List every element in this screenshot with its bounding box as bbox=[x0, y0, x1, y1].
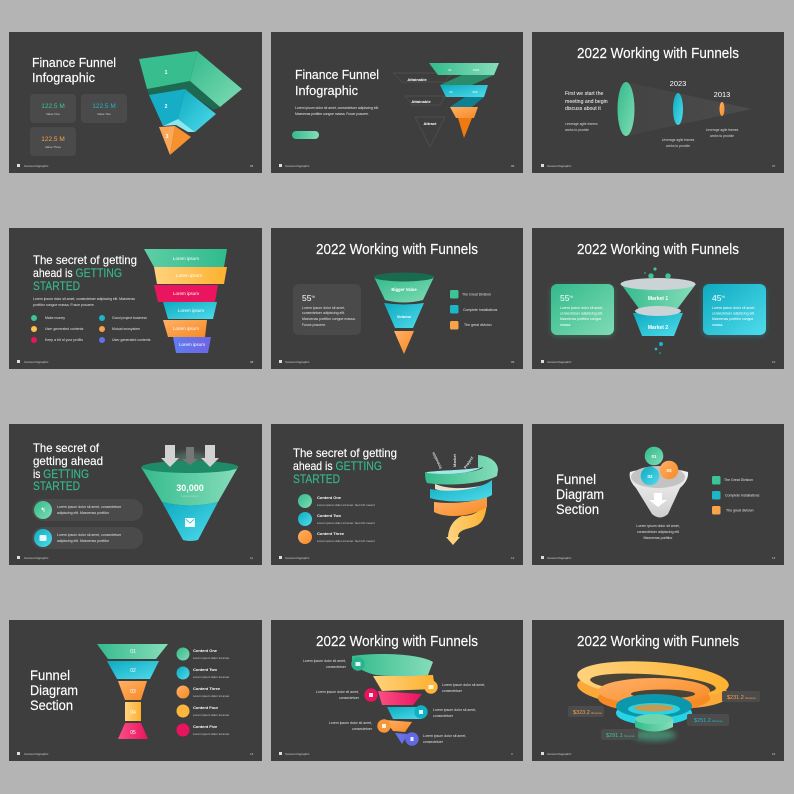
stat card: Maecenas porttitor congue massa. bbox=[302, 317, 356, 321]
title: Finance Funnel bbox=[32, 55, 116, 70]
footer: Canva Infographic bbox=[24, 164, 49, 168]
title: Funnel bbox=[556, 472, 596, 487]
title: Infographic bbox=[32, 70, 95, 85]
ghost labels bbox=[407, 77, 437, 126]
title: STARTED bbox=[293, 472, 340, 486]
footer bbox=[279, 360, 515, 364]
body text: Maecenas porttitor congue massa. Fusce posuere. bbox=[295, 112, 369, 116]
value label: orange left: $323.2 Revenue bbox=[573, 710, 602, 716]
captions: Lorem ipsum dolor sit amet, bbox=[442, 683, 485, 687]
title bbox=[33, 253, 137, 293]
numbered balls: 02 bbox=[647, 474, 653, 479]
legend bbox=[450, 290, 498, 330]
funnel: Lorem ipsum bbox=[178, 308, 204, 313]
green card: massa. bbox=[560, 323, 571, 327]
title: The secret of getting bbox=[293, 446, 397, 460]
funnel: Bigger Value bbox=[391, 287, 417, 292]
captions: works to provide bbox=[666, 144, 690, 148]
content list: Content One bbox=[193, 648, 218, 653]
captions: Lorem ipsum dolor sit amet, bbox=[303, 659, 346, 663]
content list: Content Four bbox=[193, 705, 219, 710]
title: Diagram bbox=[30, 683, 78, 698]
green card: 55 bbox=[560, 293, 569, 303]
content list: Content One bbox=[317, 495, 342, 500]
title bbox=[33, 441, 103, 493]
footer: 13 bbox=[772, 556, 776, 560]
stat cards: Value One bbox=[46, 112, 60, 116]
pill one: Lorem ipsum dolor sit amet, consectetuer bbox=[57, 505, 122, 509]
pill one: ↰ bbox=[40, 507, 46, 514]
legend: The great division bbox=[464, 323, 492, 327]
captions: works to provide bbox=[710, 134, 734, 138]
caption: Maecenas porttitor bbox=[644, 536, 673, 540]
legend: The Great Division bbox=[462, 292, 491, 296]
panel: stacked tilted funnel bbox=[271, 620, 523, 761]
content list: Lorem ipsum dolor sit amet. Get rich meant bbox=[317, 539, 375, 543]
footer: Canva Infographic bbox=[547, 752, 572, 756]
content list: Lorem ipsum dolor sit amet. Get rich meant bbox=[317, 503, 375, 507]
ghost labels: Attainable bbox=[407, 77, 427, 82]
arrows bbox=[161, 445, 219, 467]
footer: Canva Infographic bbox=[24, 556, 49, 560]
title: Section bbox=[556, 502, 599, 517]
title bbox=[32, 55, 116, 85]
bullet list: User generated contents bbox=[45, 327, 84, 331]
funnel: Lorem ipsum bbox=[173, 256, 199, 261]
pill two: adipiscing elit. Maecenas porttitor bbox=[57, 539, 110, 543]
legend: The great division bbox=[726, 508, 754, 512]
panel: six-step funnel bbox=[9, 228, 262, 369]
green card: % bbox=[569, 294, 573, 299]
stat card: consectetuer adipiscing elit. bbox=[302, 311, 345, 315]
funnel: 30,000 bbox=[176, 483, 204, 493]
title: Funnel bbox=[30, 668, 70, 683]
stat cards: Value Three bbox=[45, 145, 61, 149]
panel: ring funnel bbox=[532, 620, 784, 761]
title: The secret of getting bbox=[33, 253, 137, 267]
captions: consectetuer bbox=[442, 689, 463, 693]
funnel bbox=[144, 249, 227, 353]
footer: 3 bbox=[511, 752, 513, 756]
funnel: 04 bbox=[130, 710, 136, 716]
content list: Lorem ipsum dolor sit amet bbox=[193, 675, 229, 679]
footer: 16 bbox=[772, 752, 776, 756]
3D funnel bbox=[139, 51, 242, 155]
title: Finance Funnel bbox=[295, 67, 379, 82]
footer: 12 bbox=[511, 556, 515, 560]
stat card: Fusce posuere. bbox=[302, 323, 326, 327]
heading: 2022 Working with Funnels bbox=[577, 242, 739, 258]
heading: 2022 Working with Funnels bbox=[316, 242, 478, 258]
ghost labels: Attract bbox=[424, 121, 437, 126]
legend: Complete Installations bbox=[725, 494, 760, 498]
title bbox=[293, 446, 397, 486]
green card: Lorem ipsum dolor sit amet, bbox=[560, 306, 603, 310]
pill one: adipiscing elit. Maecenas porttitor bbox=[57, 511, 110, 515]
body text bbox=[295, 106, 379, 116]
captions: consectetuer bbox=[423, 740, 444, 744]
title bbox=[295, 67, 379, 98]
captions: Leverage agile frames bbox=[662, 138, 695, 142]
legend bbox=[712, 476, 760, 514]
value label: orange right: $231.2 Revenue bbox=[727, 695, 756, 701]
title bbox=[556, 472, 604, 517]
footer: Canva Infographic bbox=[285, 164, 310, 168]
bullet list: Keep a bit of your profits bbox=[45, 338, 83, 342]
ellipses bbox=[618, 82, 724, 136]
funnel: Lorem ipsum bbox=[179, 342, 205, 347]
content list: Content Two bbox=[317, 513, 341, 518]
blue card: 45 bbox=[712, 293, 721, 303]
numbered balls: 01 bbox=[651, 454, 657, 459]
stat cards: 122.5 M bbox=[92, 103, 116, 110]
lead text: First we start the bbox=[565, 91, 603, 97]
caption: consectetuer adipiscing elit bbox=[637, 530, 679, 534]
panel: three-tier funnel bbox=[271, 228, 523, 369]
title: STARTED bbox=[33, 479, 80, 493]
pill two bbox=[32, 527, 143, 549]
title: Section bbox=[30, 698, 73, 713]
icon: mail bbox=[185, 518, 195, 527]
value label: orange left bbox=[568, 706, 604, 717]
footer: 05 bbox=[250, 164, 254, 168]
footer bbox=[541, 752, 776, 756]
bullet list: Good project business bbox=[112, 316, 147, 320]
value label: orange right bbox=[722, 691, 760, 702]
footer: 08 bbox=[250, 360, 254, 364]
funnel: 02 bbox=[130, 668, 136, 674]
bullet list: User-generated contents bbox=[112, 338, 151, 342]
funnel: Lorem ipsum bbox=[176, 273, 202, 278]
ribbon funnel bbox=[429, 63, 499, 138]
funnel bbox=[374, 272, 434, 354]
bullet list bbox=[31, 315, 151, 343]
funnel bbox=[620, 278, 696, 336]
numbered balls bbox=[641, 447, 678, 485]
lead text: discuss about it bbox=[565, 106, 601, 112]
funnel: Market 2 bbox=[648, 325, 668, 331]
funnel: Lorem ipsum bbox=[181, 494, 199, 498]
green card bbox=[551, 284, 614, 336]
blue card: Lorem ipsum dolor sit amet, bbox=[712, 306, 755, 310]
footer bbox=[541, 164, 776, 168]
years bbox=[670, 79, 730, 99]
content list: Content Three bbox=[193, 686, 221, 691]
footer bbox=[17, 164, 254, 168]
spiral ribbon bbox=[425, 455, 498, 545]
panel: working with funnels cone bbox=[532, 32, 784, 173]
content list: Lorem ipsum dolor sit amet bbox=[193, 656, 229, 660]
content list: Lorem ipsum dolor sit amet bbox=[193, 694, 229, 698]
icon circles bbox=[351, 657, 438, 746]
panel: spiral funnel bbox=[271, 424, 523, 565]
footer: Canva Infographic bbox=[547, 556, 572, 560]
years: 2013 bbox=[714, 90, 730, 99]
ribbon labels: Market bbox=[452, 453, 457, 467]
funnel: Volume bbox=[397, 314, 412, 319]
title: The secret of bbox=[33, 441, 100, 455]
value label: cyan: $251.2 Revenue bbox=[694, 718, 723, 724]
legend: The Great Division bbox=[724, 478, 753, 482]
footer: Canva Infographic bbox=[547, 164, 572, 168]
title: Infographic bbox=[295, 83, 358, 98]
captions bbox=[565, 122, 739, 148]
panel: finance funnel ribbon bbox=[271, 32, 523, 173]
heading: 2022 Working with Funnels bbox=[577, 634, 739, 650]
content list: Content Three bbox=[317, 531, 345, 536]
ghost labels: Attainable bbox=[411, 99, 431, 104]
caption: Lorem ipsum dolor sit amet, bbox=[636, 524, 680, 528]
captions: Lorem ipsum dolor sit amet, bbox=[423, 734, 466, 738]
stat cards: 122.5 M bbox=[41, 136, 65, 143]
footer bbox=[17, 752, 254, 756]
content list bbox=[298, 494, 375, 544]
pill two: Lorem ipsum dolor sit amet, consectetuer bbox=[57, 533, 122, 537]
captions: Leverage agile frames bbox=[706, 128, 739, 132]
ribbon funnel: 01 bbox=[448, 68, 452, 72]
captions: works to provide bbox=[565, 128, 589, 132]
blue card: % bbox=[721, 294, 725, 299]
stat card: 55 bbox=[302, 293, 311, 303]
title: ahead is GETTING bbox=[33, 266, 122, 280]
ribbon funnel: 500 bbox=[472, 90, 478, 94]
cone bbox=[626, 82, 752, 136]
footer: Canva Infographic bbox=[24, 360, 49, 364]
blue card: consectetuer adipiscing elit. bbox=[712, 312, 755, 316]
footer bbox=[17, 360, 254, 364]
ribbon funnel: 02 bbox=[449, 90, 453, 94]
footer bbox=[279, 752, 513, 756]
footer: Canva Infographic bbox=[285, 752, 310, 756]
ribbon funnel: 1000 bbox=[473, 68, 480, 72]
content list: Content Two bbox=[193, 667, 217, 672]
funnel: 03 bbox=[130, 689, 136, 695]
value label: green bbox=[601, 729, 638, 740]
funnel: 05 bbox=[130, 730, 136, 736]
captions: Lorem ipsum dolor sit amet, bbox=[329, 721, 372, 725]
footer: 14 bbox=[250, 752, 254, 756]
stacked rings bbox=[576, 657, 730, 741]
captions: Lorem ipsum dolor sit amet, bbox=[316, 690, 359, 694]
funnel bbox=[97, 644, 168, 739]
heading: 2022 Working with Funnels bbox=[316, 634, 478, 650]
bullet list: Make money bbox=[45, 316, 65, 320]
panel: hourglass funnel bbox=[9, 620, 262, 761]
ribbon labels: Project bbox=[463, 455, 475, 470]
footer: 06 bbox=[511, 164, 515, 168]
stat card: Lorem ipsum dolor sit amet, bbox=[302, 306, 345, 310]
funnel: 01 bbox=[130, 649, 136, 655]
content list bbox=[176, 648, 229, 736]
3D funnel: 2 bbox=[165, 104, 168, 110]
footer bbox=[541, 556, 776, 560]
body text bbox=[33, 297, 135, 307]
captions: consectetuer bbox=[339, 696, 360, 700]
3D funnel: 1 bbox=[165, 70, 168, 76]
captions: consectetuer bbox=[433, 714, 454, 718]
footer: 11 bbox=[250, 556, 253, 560]
funnel: Market 1 bbox=[648, 296, 668, 302]
content list: Lorem ipsum dolor sit amet bbox=[193, 713, 229, 717]
pill one bbox=[32, 499, 143, 521]
dots bbox=[644, 267, 671, 354]
numbered balls: 03 bbox=[666, 468, 672, 473]
funnel: Lorem ipsum bbox=[173, 326, 199, 331]
lead text: meeting and begin bbox=[565, 99, 608, 105]
content list: Content Five bbox=[193, 724, 218, 729]
funnel layers bbox=[352, 654, 435, 744]
white funnel bbox=[630, 466, 688, 518]
funnel: Lorem ipsum bbox=[173, 291, 199, 296]
footer bbox=[541, 360, 776, 364]
value label: green: $291.1 Revenue bbox=[606, 733, 635, 739]
captions: Lorem ipsum dolor sit amet, bbox=[433, 708, 476, 712]
content list: Lorem ipsum dolor sit amet. Get rich meant bbox=[317, 521, 375, 525]
stat cards: Value Two bbox=[97, 112, 111, 116]
legend: Complete Installations bbox=[463, 308, 498, 312]
funnel bbox=[141, 452, 238, 541]
ghost outline funnel bbox=[393, 73, 452, 147]
blue card bbox=[703, 284, 766, 336]
years: 2023 bbox=[670, 79, 686, 88]
green card: Maecenas porttitor congue bbox=[560, 317, 601, 321]
footer bbox=[279, 556, 515, 560]
stat card: % bbox=[311, 294, 315, 299]
bullet list: Mutual ecosystem bbox=[112, 327, 140, 331]
content list: Lorem ipsum dolor sit amet bbox=[193, 732, 229, 736]
footer bbox=[279, 164, 515, 168]
green card: consectetuer adipiscing elit. bbox=[560, 312, 603, 316]
footer: 07 bbox=[772, 164, 776, 168]
captions: Leverage agile frames bbox=[565, 122, 598, 126]
panel: 30,000 funnel bbox=[9, 424, 262, 565]
captions bbox=[303, 659, 485, 744]
value label: cyan bbox=[687, 714, 729, 726]
stat card bbox=[293, 284, 361, 335]
stat cards: 122.5 M bbox=[41, 103, 65, 110]
lead text bbox=[565, 91, 608, 112]
footer: 09 bbox=[511, 360, 515, 364]
body text: Lorem ipsum dolor sit amet, consectetuer adipiscing elit. Maecenas bbox=[33, 297, 135, 301]
footer bbox=[17, 556, 253, 560]
footer: 10 bbox=[772, 360, 776, 364]
title: is GETTING bbox=[33, 467, 89, 481]
button bbox=[292, 131, 319, 139]
heading: 2022 Working with Funnels bbox=[577, 46, 739, 62]
title bbox=[30, 668, 78, 713]
ribbon labels: Innovation bbox=[430, 451, 443, 470]
caption bbox=[636, 524, 680, 540]
captions: consectetuer bbox=[326, 665, 347, 669]
3D funnel: 3 bbox=[166, 134, 169, 140]
footer: Canva Infographic bbox=[24, 752, 49, 756]
panel: funnel diagram with balls bbox=[532, 424, 784, 565]
panel: two markets funnel bbox=[532, 228, 784, 369]
blue card: Maecenas porttitor congue bbox=[712, 317, 753, 321]
footer: Canva Infographic bbox=[285, 360, 310, 364]
title: STARTED bbox=[33, 279, 80, 293]
title: Diagram bbox=[556, 487, 604, 502]
body text: porttitor congue massa. Fusce posuere. bbox=[33, 303, 95, 307]
captions: consectetuer bbox=[352, 727, 373, 731]
title: getting ahead bbox=[33, 454, 103, 468]
blue card: massa. bbox=[712, 323, 723, 327]
ribbon labels bbox=[430, 451, 475, 470]
panel: finance funnel 3D bbox=[9, 32, 262, 173]
body text: Lorem ipsum dolor sit amet, consectetuer adipiscing elit. bbox=[295, 106, 379, 110]
footer: Canva Infographic bbox=[547, 360, 572, 364]
stat cards bbox=[30, 94, 127, 156]
footer: Canva Infographic bbox=[285, 556, 310, 560]
title: ahead is GETTING bbox=[293, 459, 382, 473]
